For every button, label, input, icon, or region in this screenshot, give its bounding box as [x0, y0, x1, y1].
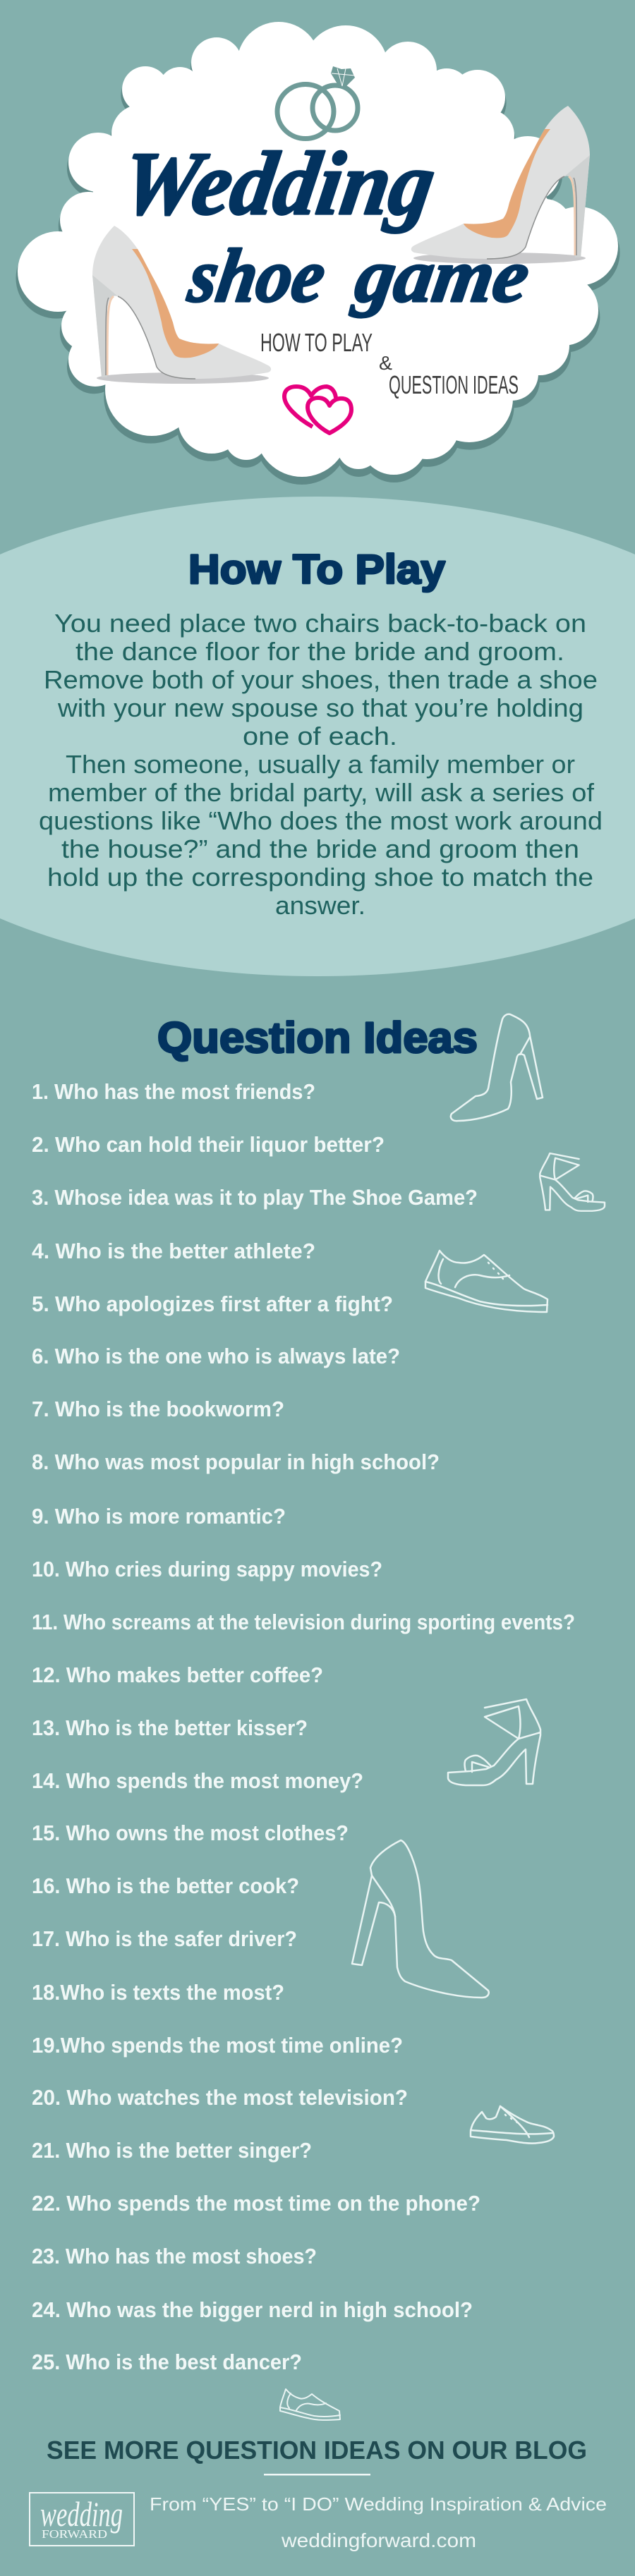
cloud shadow	[16, 27, 620, 485]
list: questions	[32, 1079, 575, 2374]
list: questions: 16. Who is the better cook?	[32, 1873, 299, 1898]
list: questions: 3. Whose idea was it to play The Shoe Game?	[32, 1185, 478, 1210]
list: questions: 23. Who has the most shoes?	[32, 2244, 317, 2268]
list: questions: 18.Who is texts the most?	[32, 1980, 284, 2005]
icon: wedding rings with diamond	[277, 66, 358, 138]
text: instructions: answer.	[275, 891, 365, 920]
text: tagline: From “YES” to “I DO” Wedding Inspiration & Advice	[150, 2493, 607, 2515]
icon: outline oxford shoe	[425, 1251, 548, 1312]
logo: wedding forward: FORWARD	[42, 2527, 107, 2541]
title: shoe game: shoe	[183, 233, 331, 318]
icon: outline sandal large	[448, 1699, 540, 1785]
footer call to action: SEE MORE QUESTION IDEAS ON OUR BLOG	[47, 2436, 587, 2465]
text: website: weddingforward.com	[281, 2529, 476, 2551]
cloud shape	[18, 22, 618, 477]
list: questions: 12. Who makes better coffee?	[32, 1663, 323, 1687]
list: questions: 19.Who spends the most time online?	[32, 2033, 403, 2058]
logo: wedding forward: wedding	[40, 2494, 123, 2534]
list: questions: 1. Who has the most friends?	[32, 1079, 315, 1104]
text: instructions: Then someone, usually a family member or	[66, 750, 575, 779]
icon: outline oxford shoe small	[280, 2389, 340, 2420]
title: shoe game: game	[348, 233, 535, 318]
title: shoe game	[183, 233, 535, 318]
text: instructions	[39, 609, 603, 920]
text: instructions: questions like “Who does the most work around	[39, 806, 603, 835]
heading: how to play: How To Play	[188, 547, 445, 593]
text: instructions: member of the bridal party, will ask a series of	[48, 778, 595, 807]
subtitle: how to play and question ideas: QUESTION IDEAS	[389, 370, 519, 399]
text: instructions: one of each.	[243, 722, 397, 751]
list: questions: 11. Who screams at the television during sporting events?	[32, 1610, 575, 1634]
title: Wedding: Wedding	[116, 133, 442, 233]
list: questions: 6. Who is the one who is always late?	[32, 1344, 400, 1368]
list: questions: 22. Who spends the most time on the phone?	[32, 2191, 480, 2216]
list: questions: 24. Who was the bigger nerd in high school?	[32, 2297, 473, 2322]
icon: outline sneaker	[471, 2106, 554, 2144]
subtitle: how to play and question ideas: &	[379, 352, 392, 374]
subtitle: how to play and question ideas	[260, 328, 519, 399]
list: questions: 15. Who owns the most clothes?	[32, 1821, 349, 1845]
list: questions: 10. Who cries during sappy movies?	[32, 1557, 382, 1581]
list: questions: 14. Who spends the most money?	[32, 1768, 363, 1793]
icon: left high heel	[92, 226, 271, 384]
subtitle: how to play and question ideas: HOW TO PLAY	[260, 328, 373, 357]
light oval background	[0, 497, 635, 976]
panel: cloud header	[16, 22, 620, 485]
list: questions: 17. Who is the safer driver?	[32, 1926, 297, 1951]
text: instructions: Remove both of your shoes, then trade a shoe	[44, 665, 598, 694]
text: instructions: You need place two chairs back-to-back on	[54, 609, 586, 638]
icon: outline pump top	[451, 1014, 543, 1121]
text: instructions: the house?” and the bride and groom then	[61, 834, 579, 863]
list: questions: 21. Who is the better singer?	[32, 2138, 312, 2163]
heading: question ideas: Question Ideas	[157, 1014, 478, 1062]
panel: how to play	[0, 497, 635, 976]
list: questions: 13. Who is the better kisser?	[32, 1715, 308, 1740]
text: instructions: the dance floor for the bride and groom.	[75, 637, 564, 666]
icon: outline pump large	[352, 1840, 489, 1998]
list: questions: 2. Who can hold their liquor better?	[32, 1132, 385, 1157]
text: instructions: with your new spouse so that you’re holding	[57, 693, 583, 722]
list: questions: 25. Who is the best dancer?	[32, 2350, 302, 2374]
text: instructions: hold up the corresponding shoe to match the	[47, 863, 593, 892]
list: questions: 9. Who is more romantic?	[32, 1504, 286, 1529]
icon: right high heel	[411, 106, 590, 264]
list: questions: 4. Who is the better athlete?	[32, 1239, 315, 1263]
list: questions: 8. Who was most popular in high school?	[32, 1450, 440, 1474]
list: questions: 5. Who apologizes first after a fight?	[32, 1292, 393, 1316]
list: questions: 20. Who watches the most television?	[32, 2085, 408, 2110]
logo: wedding forward	[30, 2493, 134, 2546]
icon: two pink hearts	[284, 387, 351, 433]
icon: outline sandal small	[540, 1153, 605, 1211]
list: questions: 7. Who is the bookworm?	[32, 1397, 284, 1421]
